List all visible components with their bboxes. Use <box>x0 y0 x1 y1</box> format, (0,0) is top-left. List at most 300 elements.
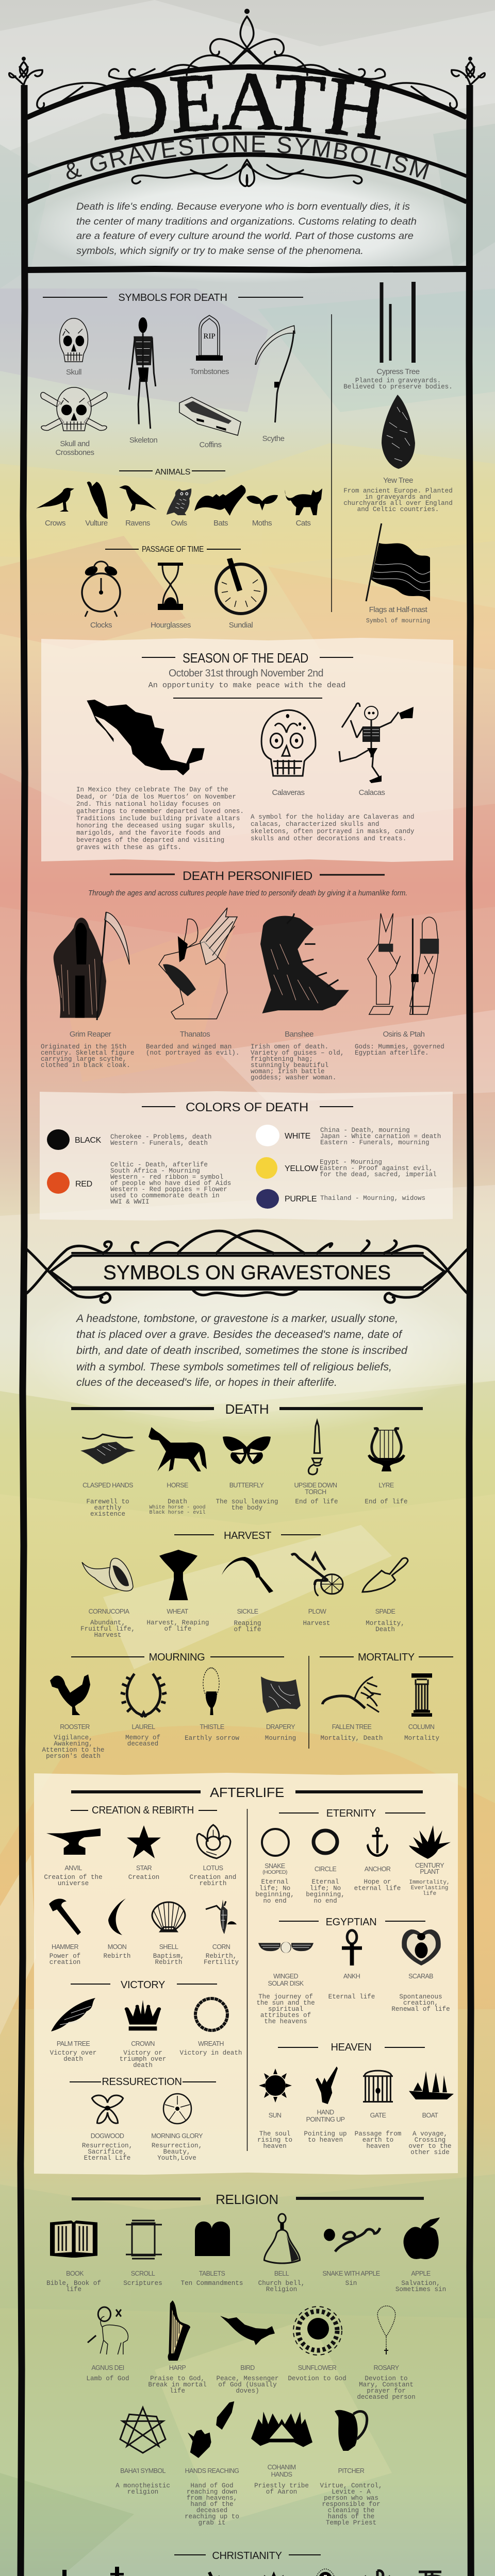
icon: coffin <box>179 397 241 449</box>
icon: hand pointing up: POINTING UP <box>306 2116 345 2123</box>
icon: yew tree: in graveyards and <box>365 494 431 501</box>
icon: anvil: ANVIL <box>64 1865 82 1872</box>
icon: crow: Crows <box>45 519 65 528</box>
icon: baha'i symbol: BAHA'I SYMBOL <box>120 2467 166 2475</box>
icon: gate: heaven <box>366 2143 390 2150</box>
color: black: BLACK <box>75 1136 102 1145</box>
icon: lotus: Creation and <box>190 1874 236 1881</box>
icon: sunflower <box>288 2307 346 2382</box>
color: red <box>47 1161 231 1206</box>
icon: shell: Rebirth <box>155 1959 182 1966</box>
icon: anvil <box>44 1828 103 1887</box>
icon: rooster: ROOSTER <box>60 1723 90 1731</box>
icon: calavera: Calaveras <box>272 788 305 797</box>
icon: circle: life; No <box>310 1885 341 1892</box>
section: religion <box>46 2192 446 2527</box>
gate ornament scrolls <box>9 9 485 186</box>
icon: morning glory: Youth,Love <box>157 2155 196 2162</box>
heading: mourning: MOURNING <box>149 1652 205 1663</box>
color: black <box>47 1129 211 1150</box>
icon: wreath: Victory in death <box>180 2049 242 2057</box>
icon: hourglass <box>151 563 191 630</box>
mexico text: honoring the deceased using sugar skulls, <box>76 822 236 829</box>
figure: grim reaper: carrying large scythe, <box>41 1056 126 1063</box>
mexico text: graves with these as gifts. <box>76 844 182 851</box>
icon: upside down torch: UPSIDE DOWN <box>294 1482 337 1489</box>
icon: circle: no end <box>314 1897 337 1905</box>
icon: cornucopia: CORNUCOPIA <box>89 1608 130 1615</box>
icon: rooster: Attention to the <box>42 1747 104 1754</box>
icon: rosary <box>357 2306 416 2401</box>
figure: banshee: Variety of guises – old, <box>251 1049 344 1057</box>
figure: grim reaper: Originated in the 15th <box>41 1043 126 1050</box>
icon: owl <box>167 488 191 528</box>
heading: religion: RELIGION <box>216 2192 278 2207</box>
icon: thistle: Earthly sorrow <box>185 1735 239 1742</box>
icon: hands reaching: reaching up to <box>185 2513 239 2520</box>
icon: cornucopia: Fruitful life, <box>80 1625 135 1633</box>
section: death personified <box>41 869 444 1081</box>
icon: spade: SPADE <box>375 1608 395 1615</box>
intro text: gravestones: with a symbol. These symbols sometimes tell of religious beliefs, <box>76 1361 392 1373</box>
intro text: gravestones: A headstone, tombstone, or gravestone is a marker, usually stone, <box>75 1313 398 1325</box>
icon: sun: The soul <box>259 2130 290 2138</box>
title: Death <box>107 73 386 140</box>
icon: hands reaching: HANDS REACHING <box>185 2467 239 2475</box>
icon: hooped snake <box>255 1829 294 1905</box>
icon: clasped hands: existence <box>90 1511 125 1518</box>
icon: flag at half-mast <box>366 523 430 624</box>
icon: laurel: LAUREL <box>131 1723 155 1731</box>
icon: upside down torch: TORCH <box>305 1488 326 1496</box>
icon: tablets: TABLETS <box>199 2270 225 2277</box>
icon: yew tree <box>343 395 453 513</box>
icon: hammer: Power of <box>50 1953 80 1960</box>
icon: book: Bible, Book of <box>46 2280 101 2287</box>
heading: creation and rebirth: CREATION & REBIRTH <box>92 1805 194 1816</box>
icon: rosary: Devotion to <box>365 2375 408 2382</box>
icon: winged solar disk <box>256 1942 315 2025</box>
icon: star: STAR <box>136 1865 152 1872</box>
icon: scarab: creation, <box>403 1999 438 2007</box>
icon: hand pointing up: to heaven <box>308 2137 343 2144</box>
heading: eternity: ETERNITY <box>326 1808 376 1819</box>
icon: hand pointing up: Pointing up <box>304 2130 347 2138</box>
icon: wreath <box>180 1998 242 2057</box>
icon: hammer: creation <box>50 1959 80 1966</box>
heading: ressurection: RESSURECTION <box>102 2076 182 2088</box>
icon: century plant: CENTURY <box>415 1862 444 1869</box>
heading: egyptian: EGYPTIAN <box>326 1917 376 1928</box>
icon: clasped hands: Farewell to <box>86 1498 129 1505</box>
icon: wheat: WHEAT <box>167 1608 189 1615</box>
icon: skull and crossbones: Skull and <box>60 439 90 448</box>
icon: drapery: Mourning <box>265 1735 296 1742</box>
icon: rosary: deceased person <box>357 2394 416 2401</box>
icon: spade: Death <box>375 1626 395 1633</box>
icon: bell: Church bell, <box>258 2280 305 2287</box>
icon: hooped snake: SNAKE <box>265 1862 285 1870</box>
icon: boat: A voyage, <box>412 2130 448 2138</box>
icon: skeleton: Skeleton <box>129 436 157 445</box>
icon: cohanim hands: Priestly tribe <box>254 2482 309 2489</box>
icon: scroll: Scriptures <box>123 2280 162 2287</box>
figure: grim reaper: century. Skeletal figure <box>41 1049 134 1057</box>
icon: calavera <box>261 710 316 797</box>
icon: gate: Passage from <box>355 2130 401 2138</box>
color: yellow: for the dead, sacred, imperial <box>320 1171 437 1178</box>
icon: dogwood: Eternal Life <box>84 2155 130 2162</box>
icon: laurel: Memory of <box>125 1734 160 1741</box>
icon: owl: Owls <box>171 519 187 528</box>
figure: osiris and ptah: Gods: Mummies, governed <box>355 1043 444 1050</box>
icon: laurel <box>121 1674 167 1748</box>
icon: cypress tree: Believed to preserve bodies. <box>343 383 453 391</box>
icon: sickle: Reaping <box>234 1620 261 1627</box>
icon: winged solar disk: attributes of <box>260 2012 311 2019</box>
icon: column: COLUMN <box>408 1723 435 1731</box>
banner: symbols on gravestones: SYMBOLS ON GRAVESTONES <box>103 1262 391 1284</box>
icon: crown: death <box>133 2062 153 2069</box>
icon: winged solar disk: the heavens <box>264 2018 307 2025</box>
intro text <box>76 201 417 257</box>
icon: crown: CROWN <box>131 2040 155 2047</box>
icon: winged solar disk: spiritual <box>268 2006 303 2013</box>
icon: thistle: THISTLE <box>200 1723 224 1731</box>
icon: gate: GATE <box>370 2112 386 2119</box>
icon: yew tree: and Celtic countries. <box>357 506 439 513</box>
icon: drapery <box>261 1676 301 1742</box>
icon: butterfly: the body <box>232 1504 263 1512</box>
icon: lyre <box>365 1429 408 1505</box>
icon: palm: PALM TREE <box>57 2040 90 2047</box>
icon: cornucopia <box>80 1558 135 1639</box>
mexico text: Traditions include building private altars <box>76 815 240 822</box>
icon: pitcher: responsible for <box>322 2501 381 2508</box>
section: symbols for death <box>36 282 453 630</box>
icon: ankh: ANKH <box>343 1973 360 1980</box>
icon: winged solar disk: The journey of <box>258 1993 313 2001</box>
icon: rooster: Awakening, <box>54 1740 93 1748</box>
icon: hands reaching: Hand of God <box>190 2482 234 2489</box>
icon: corn: Rebirth, <box>206 1953 237 1960</box>
icon: dogwood: DOGWOOD <box>91 2132 124 2140</box>
icon: cypress tree: Cypress Tree <box>376 367 420 376</box>
mexico text: In Mexico they celebrate The Day of the <box>76 786 228 793</box>
icon: scarab: Spontaneous <box>399 1993 442 2001</box>
title: Death: DEATH <box>107 73 386 140</box>
icon: circle: Eternal <box>312 1878 339 1886</box>
figure: grim reaper: Grim Reaper <box>70 1030 111 1039</box>
icon: laurel: deceased <box>127 1740 158 1748</box>
heading: afterlife: AFTERLIFE <box>210 1785 284 1800</box>
icon: crown and cross <box>195 2569 248 2576</box>
intro text: symbols, which signify or try to make sense of the phenomena. <box>76 246 364 257</box>
figure: thanatos: Thanatos <box>180 1030 210 1039</box>
icon: hammer: HAMMER <box>52 1943 79 1951</box>
icon: sickle <box>222 1557 273 1633</box>
icon: clasped hands <box>80 1434 136 1518</box>
icon: skull and crossbones <box>41 387 107 457</box>
icon: crow <box>36 488 74 528</box>
figure: osiris and ptah: Egyptian afterlife. <box>355 1049 429 1057</box>
mexico text: Dead, or ‘Día de los Muertos’ on November <box>76 793 236 801</box>
calaveras text: A symbol for the holiday are Calaveras and <box>251 814 414 821</box>
heading: mortality: MORTALITY <box>358 1652 415 1663</box>
icon: lotus: LOTUS <box>203 1865 223 1872</box>
icon: sunflower: Devotion to God <box>288 2375 346 2382</box>
icon: calaca <box>339 703 414 797</box>
icon: snake with apple: SNAKE WITH APPLE <box>322 2270 380 2277</box>
section: mourning <box>42 1652 309 1760</box>
icon: hooped snake: no end <box>263 1897 287 1905</box>
icon: harp: HARP <box>169 2364 186 2371</box>
icon: horse: White horse - good <box>149 1505 206 1511</box>
icon: column: Mortality <box>404 1735 439 1742</box>
icon: column <box>404 1673 439 1742</box>
icon: pitcher: Levite - A <box>332 2488 371 2496</box>
color: red: RED <box>75 1180 92 1189</box>
icon: ankh: Eternal life <box>328 1993 375 2001</box>
icon: map of mexico <box>87 700 205 775</box>
icon: winged solar disk: WINGED <box>273 1973 298 1980</box>
icon: hands reaching: from heavens, <box>187 2495 237 2502</box>
icon: bat <box>194 485 246 528</box>
icon: tombstone: Tombstones <box>190 367 229 376</box>
icon: anvil: Creation of the <box>44 1874 103 1881</box>
color: purple: Thailand - Mourning, widows <box>320 1195 425 1202</box>
icon: skull and crossbones: Crossbones <box>55 448 94 457</box>
icon: rooster: person's death <box>46 1753 101 1760</box>
icon: wreath: WREATH <box>198 2040 224 2047</box>
icon: sickle: of life <box>234 1626 261 1633</box>
icon: upside down torch <box>294 1421 338 1505</box>
icon: butterfly: BUTTERFLY <box>229 1482 265 1489</box>
intro text: are a feature of every culture around the world. Part of those customs are <box>76 231 414 242</box>
icon: skeleton <box>129 317 157 445</box>
color: red: Western - red ribbon = symbol <box>110 1174 223 1181</box>
icon: boat: other side <box>410 2149 450 2156</box>
icon: circle <box>306 1831 345 1905</box>
icon: yew tree: Yew Tree <box>383 476 413 485</box>
figure: banshee: woman; Irish battle <box>251 1068 325 1075</box>
icon: shell <box>152 1902 185 1966</box>
icon: cypress tree: Planted in graveyards. <box>355 377 441 384</box>
intro text: gravestones: birth, and date of death inscribed, sometimes the stone is inscribed <box>76 1345 408 1357</box>
icon: plow: PLOW <box>308 1608 326 1615</box>
figure: banshee <box>251 913 349 1081</box>
icon: pitcher: Virtue, Control, <box>320 2482 382 2489</box>
icon: fallen tree <box>321 1677 383 1742</box>
icon: wheat: Harvest, Reaping <box>147 1619 209 1626</box>
icon: yew tree: churchyards all over England <box>343 500 453 507</box>
icon: hands reaching <box>185 2401 239 2527</box>
icon: moth <box>246 495 278 528</box>
icon: book: life <box>66 2286 81 2293</box>
icon: bat: Bats <box>213 519 228 528</box>
icon: cypress tree <box>343 282 453 391</box>
icon: harp: Break in mortal <box>148 2381 207 2388</box>
icon: palm: death <box>63 2056 83 2063</box>
icon: clock <box>82 562 120 630</box>
icon: hands reaching: reaching down <box>187 2488 237 2496</box>
figure: banshee: goddess; washer woman. <box>251 1074 336 1081</box>
icon: sunflower: SUNFLOWER <box>298 2364 337 2371</box>
icon: agnus dei: AGNUS DEI <box>91 2364 124 2371</box>
icon: dogwood <box>82 2095 133 2162</box>
icon: rosary: ROSARY <box>374 2364 400 2371</box>
icon: skull: Skull <box>66 368 81 377</box>
icon: pitcher <box>320 2410 382 2527</box>
icon: lyre: End of life <box>365 1498 408 1505</box>
icon: bird: Peace, Messenger <box>217 2375 278 2382</box>
icon: flag at half-mast: Flags at Half-mast <box>369 605 428 614</box>
icon: apple: Salvation, <box>401 2280 440 2287</box>
icon: plow: Harvest <box>303 1620 330 1627</box>
icon: cat: Cats <box>296 519 310 528</box>
icon: hooped snake: (HOOPED) <box>262 1869 287 1875</box>
icon: flag at half-mast: Symbol of mourning <box>366 618 430 624</box>
icon: hands reaching: grab it <box>199 2519 225 2527</box>
heading: season of the dead: SEASON OF THE DEAD <box>183 650 308 666</box>
icon: crown: triumph over <box>120 2056 166 2063</box>
section: mortality <box>320 1652 453 1742</box>
heading: harvest: HARVEST <box>224 1530 271 1541</box>
icon: hand pointing up: HAND <box>317 2109 334 2116</box>
dates <box>148 668 345 698</box>
figure: osiris and ptah: Osiris & Ptah <box>383 1030 425 1039</box>
calaveras text: skulls and other decorations and treats. <box>251 835 406 842</box>
icon: scroll: SCROLL <box>131 2270 155 2277</box>
icon: baha'i symbol: religion <box>127 2488 158 2496</box>
icon: hooped snake: Eternal <box>261 1878 288 1886</box>
icon: gate: earth to <box>362 2137 393 2144</box>
icon: morning glory: Resurrection, <box>152 2142 202 2149</box>
mexico text: 2nd. This national holiday focuses on <box>76 801 221 808</box>
heading: colors of death: COLORS OF DEATH <box>186 1100 308 1114</box>
icon: hammer <box>49 1899 81 1966</box>
icon: tablets <box>181 2222 243 2287</box>
icon: tombstone <box>190 315 229 376</box>
icon: IHS <box>407 2572 453 2576</box>
icon: clock: Clocks <box>90 621 112 630</box>
intro text: gravestones: clues of the deceased's life, or hopes in their afterlife. <box>76 1377 337 1388</box>
icon: apple: APPLE <box>411 2270 431 2277</box>
icon: snake with apple <box>322 2228 380 2287</box>
heading: victory: VICTORY <box>121 1979 165 1991</box>
icon: raven <box>119 485 157 528</box>
icon: star: Creation <box>128 1874 159 1881</box>
icon: eucharist <box>304 2569 347 2576</box>
icon: shell: SHELL <box>159 1943 178 1951</box>
heading: heaven: HEAVEN <box>331 2042 371 2053</box>
icon: scarab: SCARAB <box>408 1973 433 1980</box>
icon: wheat: of life <box>164 1625 191 1633</box>
icon: century plant: life <box>423 1891 436 1897</box>
color: red: South Africa - Mourning <box>110 1167 200 1175</box>
icon: morning glory <box>151 2094 203 2162</box>
icon: bell: Religion <box>266 2286 297 2293</box>
icon: scarab: Renewal of life <box>391 2006 450 2013</box>
icon: shell: Baptism, <box>153 1953 184 1960</box>
icon: eastern cross <box>91 2567 143 2576</box>
icon: sun: rising to <box>257 2137 292 2144</box>
icon: butterfly: The soul leaving <box>216 1498 278 1505</box>
icon: clasped hands: earthly <box>94 1504 122 1512</box>
icon: passion flower <box>258 2571 289 2576</box>
icon: fallen tree: FALLEN TREE <box>332 1723 372 1731</box>
icon: rosary: Mary, Constant <box>359 2381 414 2388</box>
icon: circle: beginning, <box>306 1891 345 1899</box>
icon: century plant: PLANT <box>420 1868 440 1875</box>
heading: passage of time: PASSAGE OF TIME <box>142 545 204 554</box>
panel: afterlife <box>34 1773 458 2175</box>
icon: cohanim hands: HANDS <box>271 2471 292 2478</box>
intro text: gravestones: that is placed over a grave. Besides the deceased's name, date of <box>76 1329 403 1341</box>
icon: bird: of God (Usually <box>218 2381 277 2388</box>
figure: banshee: Irish omen of death. <box>251 1043 328 1050</box>
icon: cohanim hands <box>251 2412 312 2496</box>
panel: colors of death <box>40 1091 453 1221</box>
icon: sundial <box>216 558 266 630</box>
icon: clasped hands: CLASPED HANDS <box>82 1482 133 1489</box>
intro text: the center of many traditions and organizations. Customs relating to death <box>76 216 417 227</box>
icon: coffin: Coffins <box>200 440 221 449</box>
icon: crown: Victory or <box>123 2049 162 2057</box>
icon: moth: Moths <box>252 519 272 528</box>
calaveras text: calacas, characterized skulls and <box>251 821 379 828</box>
icon: drapery: DRAPERY <box>266 1723 295 1731</box>
icon: yew tree: From ancient Europe. Planted <box>343 487 453 495</box>
icon: apple: Sometimes sin <box>395 2286 446 2293</box>
icon: bird: doves) <box>236 2387 259 2395</box>
icon: sun <box>257 2069 292 2150</box>
icon: skull <box>60 318 88 377</box>
icon: book <box>46 2221 101 2293</box>
icon: wheat <box>147 1550 209 1633</box>
icon: pitcher: PITCHER <box>338 2467 365 2475</box>
figure: thanatos <box>146 908 239 1057</box>
panel: season of the dead <box>41 638 453 862</box>
icon: sickle: SICKLE <box>237 1608 258 1615</box>
calaveras text: skeletons, often portrayed in masks, candy <box>251 828 415 835</box>
icon: hands reaching: hand of the <box>190 2501 234 2508</box>
section: christianity <box>46 2550 453 2576</box>
color: white: Japan - White carnation = death <box>320 1133 441 1140</box>
icon: bird: BIRD <box>240 2364 255 2371</box>
icon: moon: MOON <box>108 1943 127 1951</box>
icon: ankh <box>328 1930 375 2001</box>
icon: palm <box>50 1998 96 2063</box>
mexico text: beverages of the departed and visiting <box>76 837 224 844</box>
icon: circle: CIRCLE <box>315 1866 336 1873</box>
icon: morning glory: Beauty, <box>163 2148 190 2156</box>
icon: boat: BOAT <box>422 2112 438 2119</box>
icon: horse: HORSE <box>167 1482 188 1489</box>
icon: spade: Mortality, <box>366 1620 405 1627</box>
icon: moon <box>104 1899 130 1960</box>
icon: butterfly <box>216 1436 278 1512</box>
icon: thistle <box>185 1668 239 1742</box>
icon: rooster: Vigilance, <box>54 1734 93 1741</box>
icon: lyre: LYRE <box>378 1482 394 1489</box>
icon: anchor: Hope or <box>364 1878 391 1886</box>
figure: banshee: stunningly beautiful <box>251 1062 328 1069</box>
mexico text: marigolds, and the favorite foods and <box>76 829 221 837</box>
figure: grim reaper: clothed in black cloak. <box>41 1062 130 1069</box>
icon: sundial: Sundial <box>229 621 253 630</box>
icon: corn: Fertility <box>204 1959 239 1966</box>
